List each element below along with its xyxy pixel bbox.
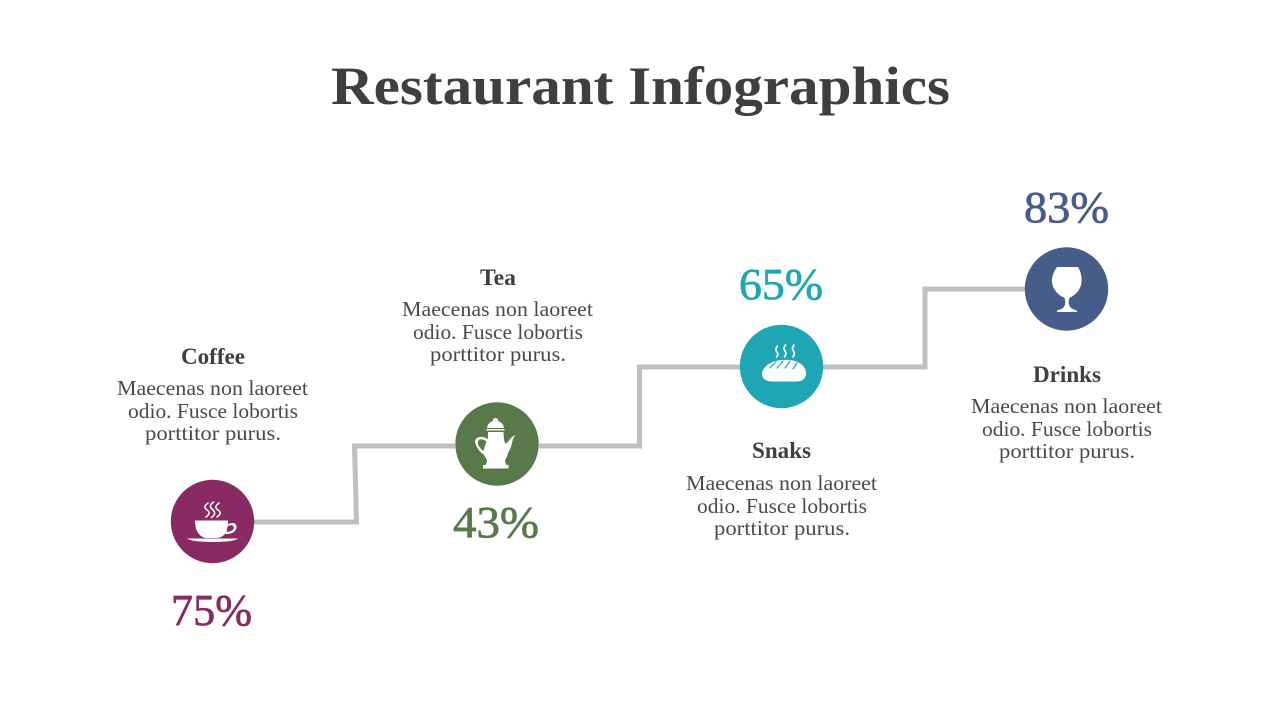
- snacks description: [686, 471, 877, 540]
- tea percentage: 43%: [453, 498, 539, 547]
- coffee description: Maecenas non laoreet: [117, 376, 308, 400]
- drinks heading: Drinks: [1033, 362, 1101, 387]
- icon: teapot: [455, 402, 539, 486]
- icon: wine glass: [1025, 247, 1108, 331]
- drinks percentage: 83%: [1024, 183, 1109, 232]
- title: Restaurant Infographics: [331, 56, 950, 116]
- coffee heading: Coffee: [181, 344, 245, 369]
- panel: drinks: [971, 183, 1162, 463]
- icon: coffee cup: [171, 480, 254, 563]
- snacks description: porttitor purus.: [714, 516, 850, 540]
- icon: bread: [740, 325, 823, 408]
- snacks description: Maecenas non laoreet: [686, 471, 877, 495]
- panel: coffee: [117, 344, 308, 635]
- drinks description: odio. Fusce lobortis: [982, 417, 1152, 441]
- drinks description: [971, 394, 1162, 463]
- snacks percentage: 65%: [739, 260, 823, 309]
- snacks description: odio. Fusce lobortis: [697, 494, 867, 518]
- stepped connector line: [254, 289, 1026, 522]
- drinks description: Maecenas non laoreet: [971, 394, 1162, 418]
- coffee description: porttitor purus.: [145, 421, 281, 445]
- panel: tea: [402, 265, 593, 547]
- tea description: [402, 297, 593, 366]
- coffee description: [117, 376, 308, 445]
- coffee percentage: 75%: [171, 586, 252, 635]
- tea description: porttitor purus.: [430, 342, 566, 366]
- coffee description: odio. Fusce lobortis: [128, 399, 298, 423]
- tea description: Maecenas non laoreet: [402, 297, 593, 321]
- tea description: odio. Fusce lobortis: [413, 320, 583, 344]
- tea heading: Tea: [480, 265, 516, 290]
- panel: snacks: [686, 260, 877, 540]
- drinks description: porttitor purus.: [999, 439, 1135, 463]
- snacks heading: Snaks: [752, 438, 811, 463]
